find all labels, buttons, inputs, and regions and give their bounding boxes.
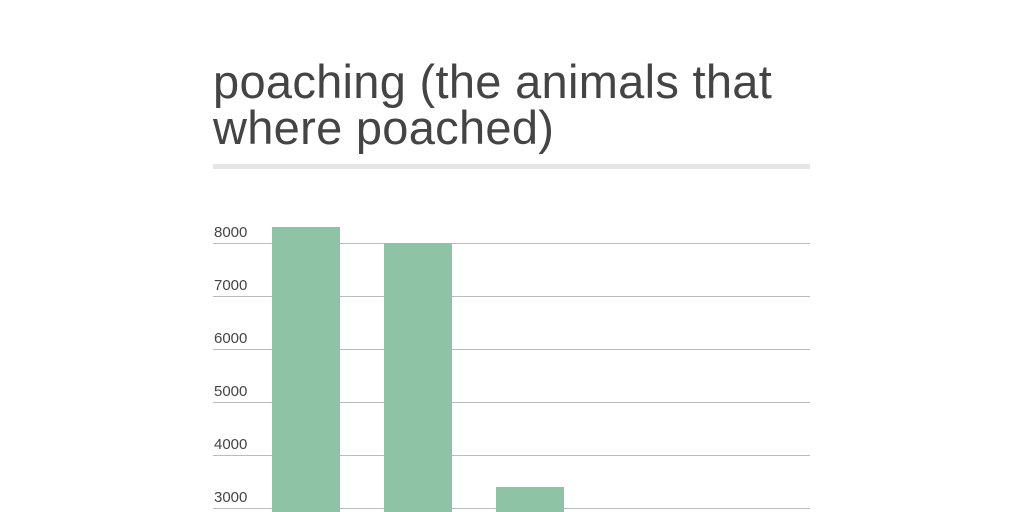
bar chart: 7000: [214, 277, 247, 294]
bar chart: 4000: [214, 436, 247, 453]
bar chart: 8000: [214, 224, 247, 241]
title: poaching (the animals that: [213, 55, 772, 108]
title: where poached): [213, 101, 554, 154]
title: [213, 55, 772, 154]
bar chart: 3000: [214, 489, 247, 506]
bar chart: 5000: [214, 383, 247, 400]
title underline: [213, 164, 810, 169]
bar chart: 6000: [214, 330, 247, 347]
